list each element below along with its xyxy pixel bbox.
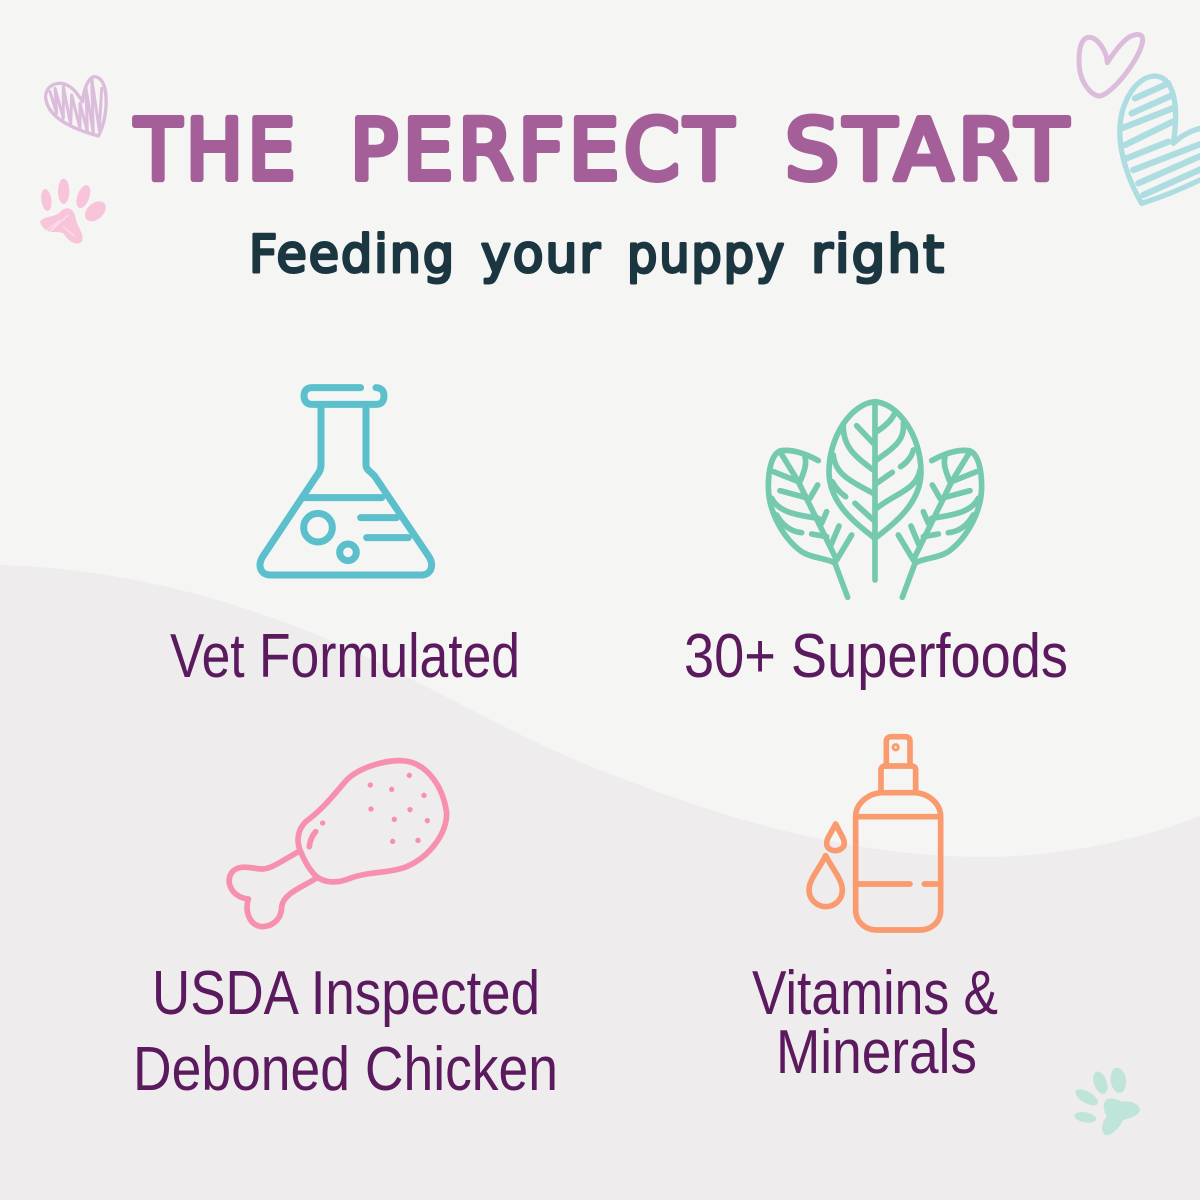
background wave bbox=[0, 565, 1200, 1200]
title bbox=[134, 101, 1073, 199]
subtitle: puppy bbox=[627, 225, 786, 285]
label: 30+ Superfoods: 30+ Superfoods bbox=[684, 622, 1068, 691]
icon: lab flask bbox=[260, 388, 432, 575]
icon: scribbled lilac heart bbox=[46, 77, 106, 136]
left leaf bbox=[768, 450, 852, 597]
title: PERFECT bbox=[350, 101, 738, 199]
icon: spray bottle with drops bbox=[809, 737, 941, 930]
label: USDA Inspected Deboned Chicken: USDA Inspected bbox=[152, 959, 540, 1028]
icon: mint paw print bbox=[1073, 1067, 1140, 1135]
label: Vitamins & Minerals: Vitamins & bbox=[752, 959, 998, 1028]
subtitle: Feeding bbox=[249, 225, 456, 285]
title: START bbox=[785, 101, 1073, 199]
subtitle: your bbox=[481, 225, 602, 285]
label: USDA Inspected Deboned Chicken: Deboned Chicken bbox=[133, 1035, 558, 1104]
icon: chicken drumstick bbox=[229, 761, 447, 927]
label: Vet Formulated: Vet Formulated bbox=[170, 622, 520, 691]
subtitle: right bbox=[811, 225, 946, 285]
title: THE bbox=[134, 101, 300, 199]
label: USDA Inspected Deboned Chicken bbox=[133, 959, 558, 1104]
icon: outline lilac heart bbox=[1079, 34, 1143, 96]
icon: pink paw print bbox=[40, 179, 110, 244]
icon: spinach leaves bbox=[768, 402, 982, 597]
label: Vitamins & Minerals: Minerals bbox=[776, 1018, 977, 1087]
centre leaf bbox=[829, 402, 921, 580]
icon: scribbled teal heart bbox=[1120, 76, 1200, 203]
subtitle bbox=[249, 225, 946, 285]
label: Vitamins & Minerals bbox=[752, 959, 998, 1087]
right leaf bbox=[898, 450, 982, 597]
